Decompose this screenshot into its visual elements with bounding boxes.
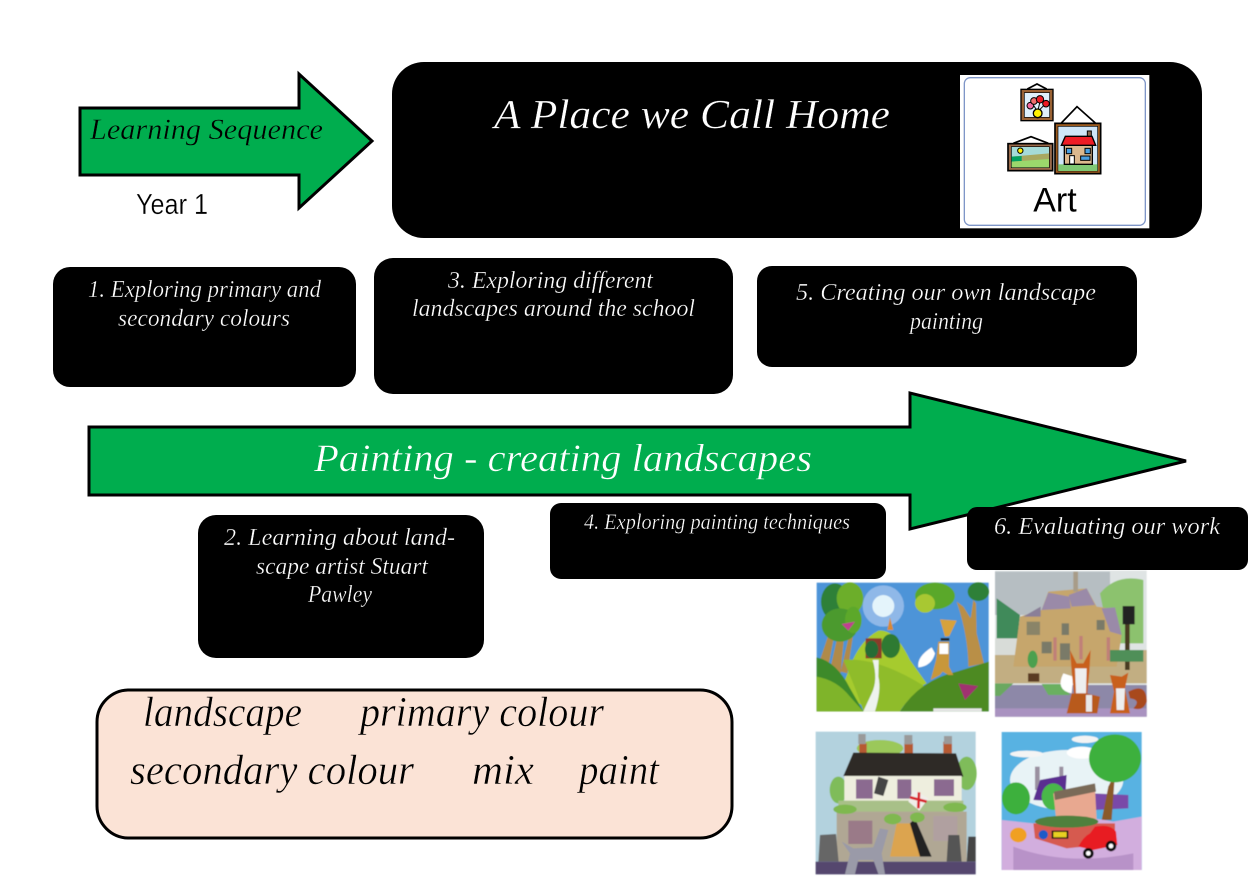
step 3 text: 3. Exploring different (447, 268, 654, 294)
step 1 text: 1. Exploring primary and (88, 277, 322, 303)
icon: art symbol card (960, 75, 1149, 228)
panel: step 2 (198, 515, 484, 658)
foxes (1061, 673, 1073, 693)
icon: flower picture (1021, 84, 1053, 121)
painting: inn with dog (816, 732, 977, 874)
arrow label: Learning Sequence (89, 113, 323, 146)
icon: house picture (1055, 107, 1101, 174)
painting: fox family at the lodge (995, 571, 1147, 717)
panel: step 4 (550, 503, 886, 579)
step 6 text: 6. Evaluating our work (994, 514, 1220, 540)
vocabulary words: secondary colour (130, 748, 415, 794)
vocabulary words: primary colour (357, 690, 605, 736)
step 5 text: 5. Creating our own landscape (796, 280, 1096, 306)
icon: landscape picture (1008, 137, 1053, 171)
fox (918, 647, 935, 667)
title: A Place we Call Home (491, 91, 890, 137)
step 4 text: 4. Exploring painting techniques (584, 509, 850, 534)
step 2 text: Pawley (307, 582, 372, 608)
step 2 text: 2. Learning about land- (224, 525, 455, 551)
panel: step 5 (757, 266, 1137, 367)
arrow: Learning Sequence (80, 74, 372, 208)
step 5 text: painting (908, 309, 983, 335)
vocabulary words: mix (472, 748, 534, 794)
arrow: painting - creating landscapes (89, 393, 1186, 529)
vocabulary words: landscape (143, 690, 302, 736)
vocabulary words: paint (576, 748, 660, 794)
painting: roundabout with red car (1002, 732, 1142, 870)
arrow heading: Painting - creating landscapes (313, 437, 812, 480)
panel: title banner (392, 62, 1202, 238)
panel: step 3 (374, 258, 733, 394)
icon label: Art (1033, 182, 1077, 220)
year label: Year 1 (136, 189, 208, 221)
panel: vocabulary (97, 690, 732, 838)
panel: step 6 (967, 507, 1248, 570)
step 3 text: landscapes around the school (412, 296, 695, 322)
panel: step 1 (53, 267, 356, 387)
painting: fox on the hills (817, 582, 989, 711)
step 2 text: scape artist Stuart (256, 554, 429, 580)
step 1 text: secondary colours (118, 306, 290, 332)
